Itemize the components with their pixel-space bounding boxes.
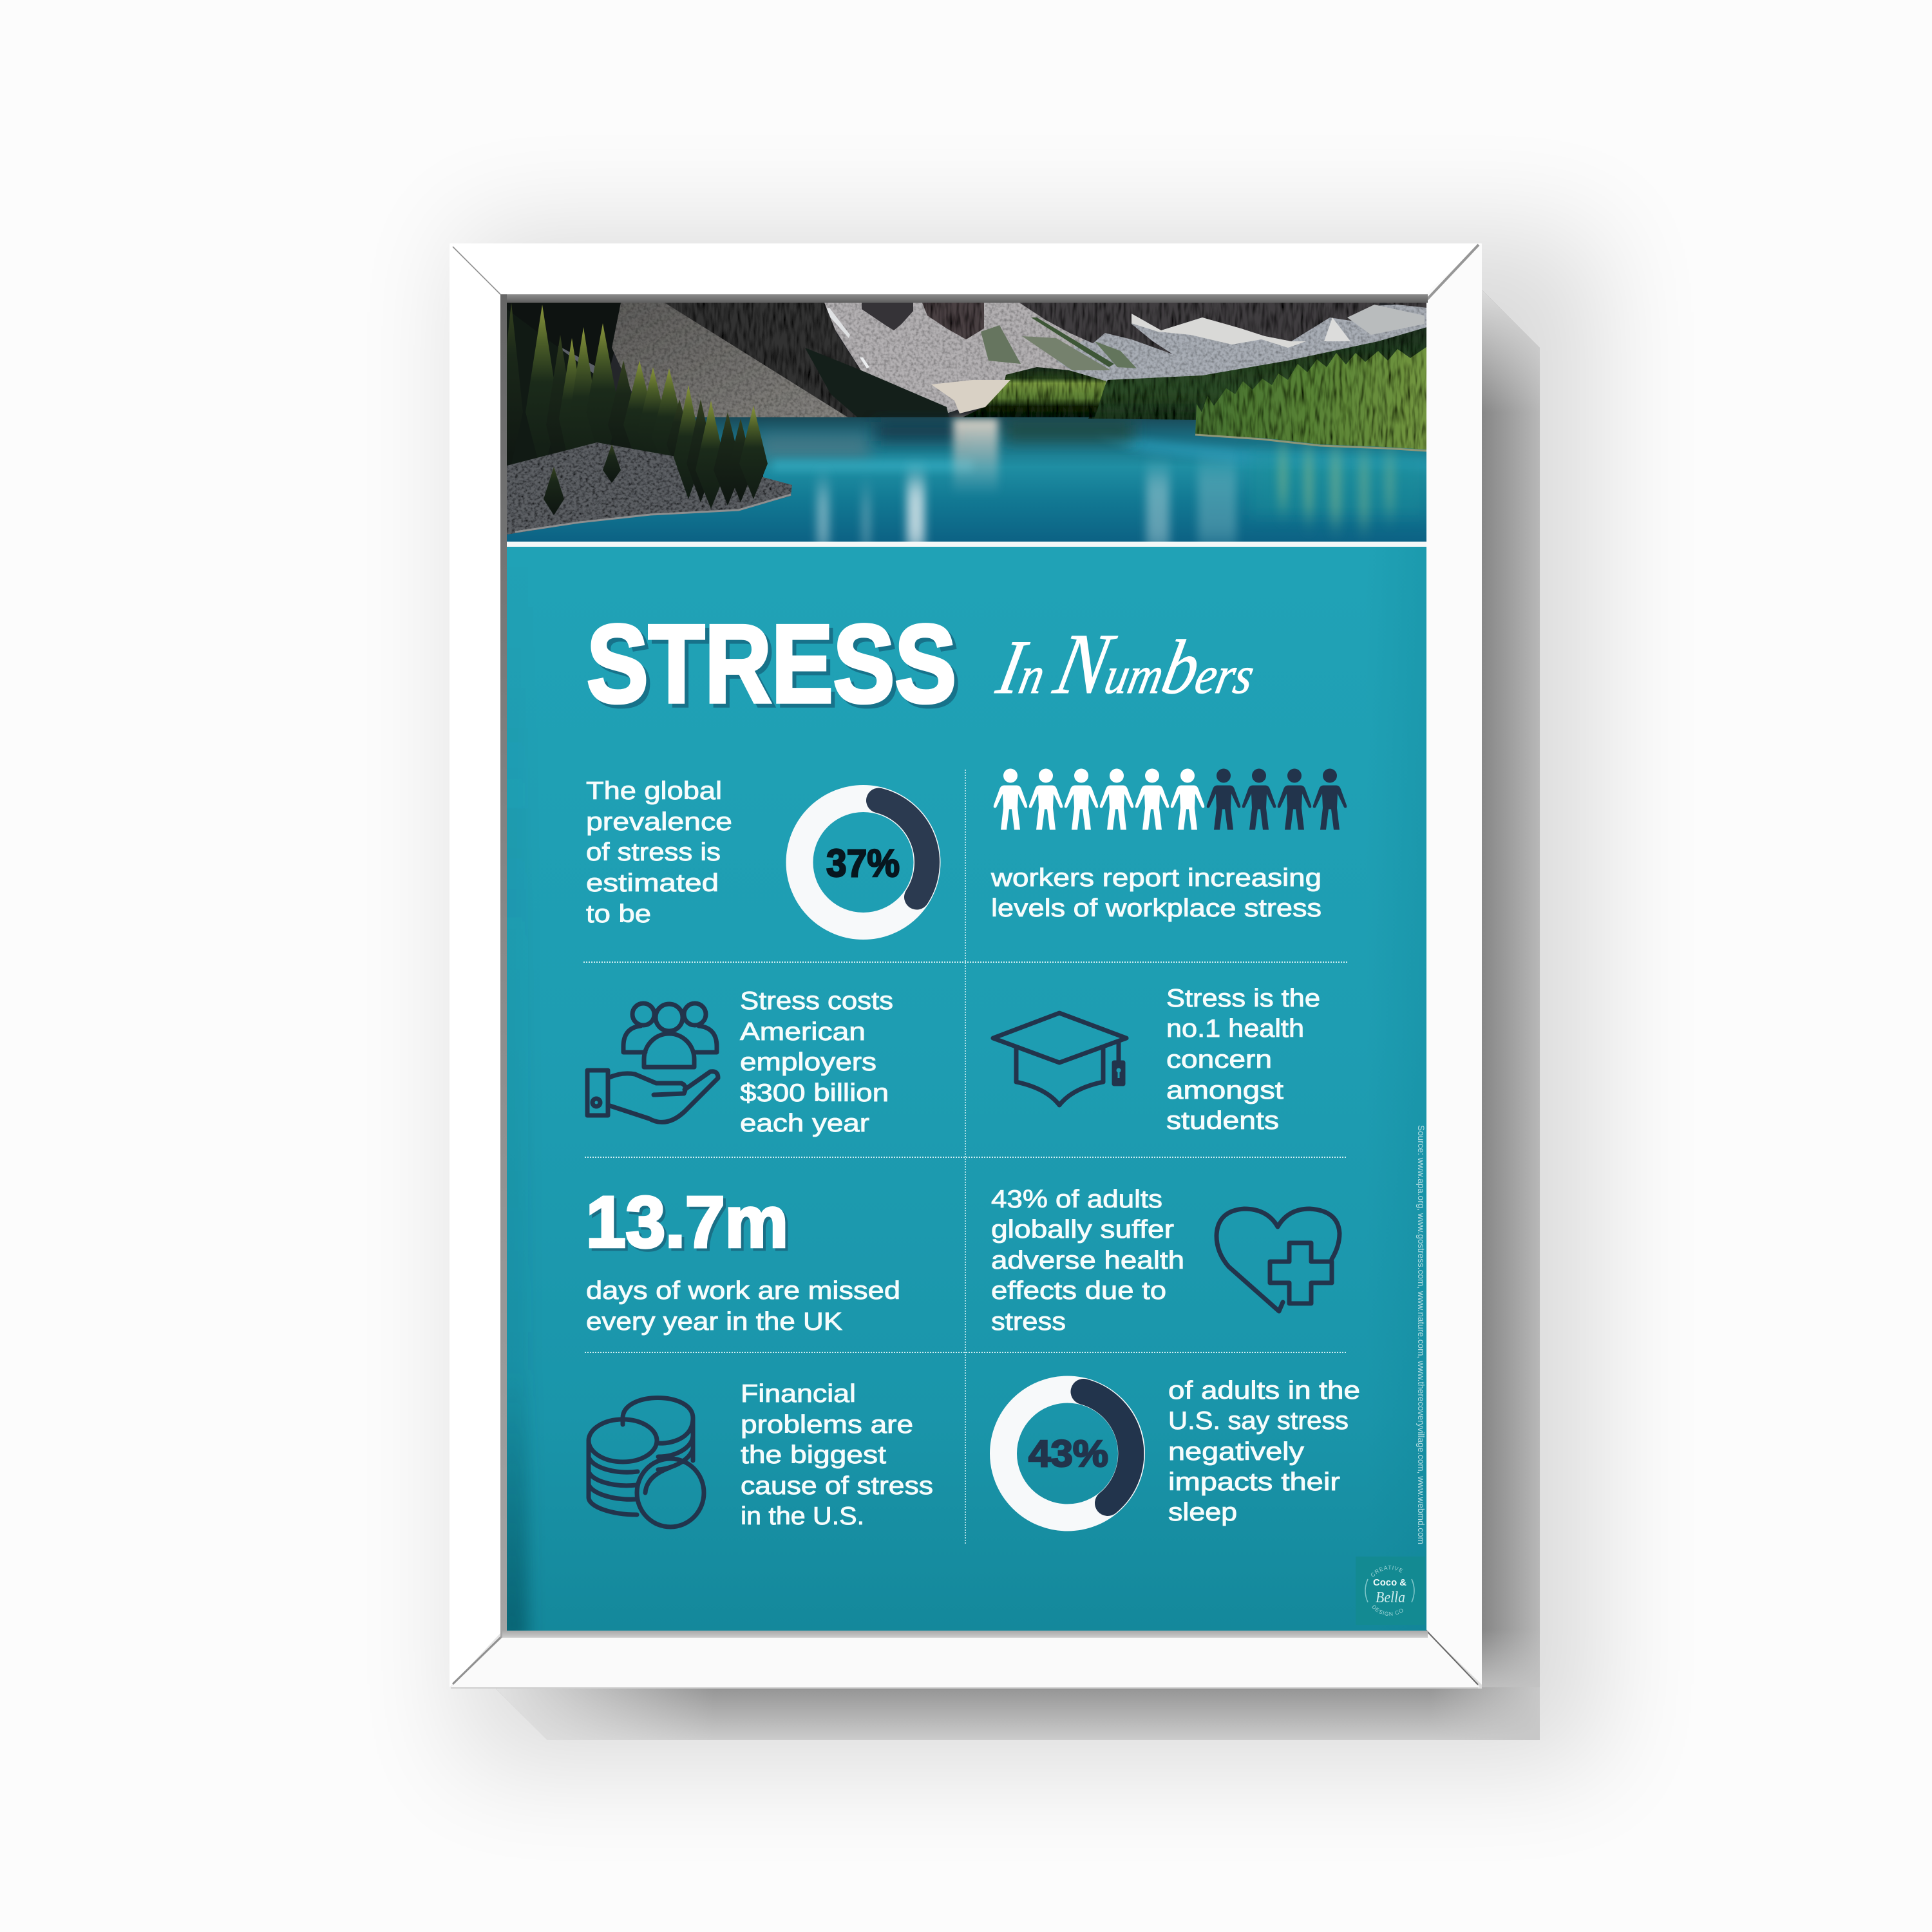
logo badge: Coco & Bella: Coco & (1373, 1578, 1407, 1588)
text: health concern: concern (1166, 1046, 1272, 1074)
central light scree slope (824, 303, 1142, 413)
lake water (507, 417, 1426, 551)
grey scree triangle (612, 303, 867, 435)
text: adverse health: adverse health (991, 1247, 1184, 1274)
text: global prevalence: prevalence (586, 808, 732, 836)
pictogram: 6 of 10 workers (994, 769, 1347, 829)
hard cast shadow of frame (496, 290, 1540, 1740)
forest shoreline (1195, 435, 1427, 451)
text: adverse health: stress (991, 1308, 1066, 1336)
source credit: Source: www.apa.org, www.gostress.com, www.nature.com, www.therecoveryvillage.com, www.webmd.com (1416, 1125, 1426, 1544)
text: workers report (990, 864, 1321, 922)
dark cliff (665, 303, 950, 430)
forest at cliff foot (805, 348, 950, 428)
text: financial problems: Financial (741, 1380, 856, 1408)
logo badge: Coco & Bella: Bella (1376, 1589, 1405, 1606)
donut chart: 37%: 37% (826, 842, 900, 885)
big number: 13.7m: 13.7m (586, 1182, 788, 1262)
text: workers report: levels of workplace stress (991, 895, 1321, 922)
grey valley (1056, 303, 1427, 386)
text: stress costs: $300 billion (740, 1079, 889, 1107)
text: global prevalence (586, 777, 732, 928)
white strip under photo (507, 542, 1426, 547)
icon: hand holding people (587, 1003, 718, 1122)
donut chart: 37% (800, 799, 927, 926)
icon: coins (589, 1397, 704, 1527)
text: financial problems: the biggest (741, 1441, 886, 1469)
text: stress costs: each year (740, 1110, 869, 1137)
snow patches (823, 305, 1425, 368)
text: sleep impact (1168, 1377, 1360, 1526)
poster mockup (430, 198, 1631, 1799)
text: sleep impact: negatively (1168, 1438, 1305, 1466)
text: global prevalence: of stress is (586, 838, 721, 866)
dark rock faces (862, 303, 1427, 354)
text: health concern: Stress is the (1166, 985, 1320, 1012)
text: days of work: days of work are missed (586, 1277, 900, 1305)
subtitle: In Numbers: In Numbers (990, 615, 1266, 712)
right foreground forest (1195, 346, 1427, 450)
rocky island (507, 442, 792, 535)
text: workers report: workers report increasing (990, 864, 1321, 892)
text: global prevalence: estimated (586, 869, 719, 897)
donut chart: 43%: 43% (1028, 1433, 1108, 1475)
icon: graduation cap (993, 1013, 1126, 1105)
logo badge: Coco & Bella: DESIGN CO (1372, 1605, 1403, 1616)
title: STRESS: STRESS (587, 602, 956, 726)
text: health concern: amongst (1166, 1077, 1283, 1104)
logo badge: Coco & Bella: CREATIVE (1371, 1566, 1403, 1577)
text: stress costs (740, 987, 893, 1137)
text: days of work (586, 1277, 900, 1336)
text: sleep impact: impacts their (1168, 1468, 1340, 1496)
island shoreline highlight (515, 495, 791, 532)
text: days of work: every year in the UK (586, 1308, 842, 1336)
text: adverse health: 43% of adults (991, 1186, 1162, 1213)
landscape photo: mountain lake (500, 303, 1427, 551)
logo badge: Coco & Bella (1356, 1557, 1425, 1625)
text: health concern: no.1 health (1166, 1015, 1304, 1043)
left dark mountainside (507, 303, 628, 473)
text: financial problems: cause of stress (741, 1472, 933, 1500)
white picture frame (450, 243, 1482, 1689)
text: health concern: students (1166, 1107, 1279, 1135)
text: health concern (1166, 985, 1320, 1135)
frame inner walls (500, 294, 1428, 1638)
text: financial problems: in the U.S. (741, 1502, 864, 1530)
dotted grid dividers (583, 770, 1347, 1545)
text: stress costs: employers (740, 1048, 876, 1076)
back conifer trees (500, 303, 692, 483)
icon: heart with cross (1217, 1209, 1340, 1311)
sand fan (931, 380, 1010, 413)
text: adverse health: effects due to (991, 1277, 1166, 1305)
text: financial problems: problems are (741, 1411, 913, 1439)
text: stress costs: American (740, 1018, 866, 1046)
donut chart: 43% (1003, 1390, 1132, 1517)
text: sleep impact: of adults in the (1168, 1377, 1360, 1405)
text: sleep impact: sleep (1168, 1499, 1237, 1526)
text: sleep impact: U.S. say stress (1168, 1407, 1349, 1435)
text: stress costs: Stress costs (740, 987, 893, 1015)
text: global prevalence: to be (586, 900, 651, 928)
teal content panel (496, 547, 1426, 1642)
text: financial problems (741, 1380, 933, 1530)
dark tree mass (507, 309, 763, 483)
text: adverse health: globally suffer (991, 1216, 1174, 1244)
front conifer trees (544, 385, 768, 515)
lit middle hill (963, 367, 1106, 417)
green patches on scree (981, 317, 1137, 370)
back forest ridge (1088, 327, 1427, 431)
text: global prevalence: The global (586, 777, 722, 805)
text: adverse health (991, 1186, 1184, 1336)
